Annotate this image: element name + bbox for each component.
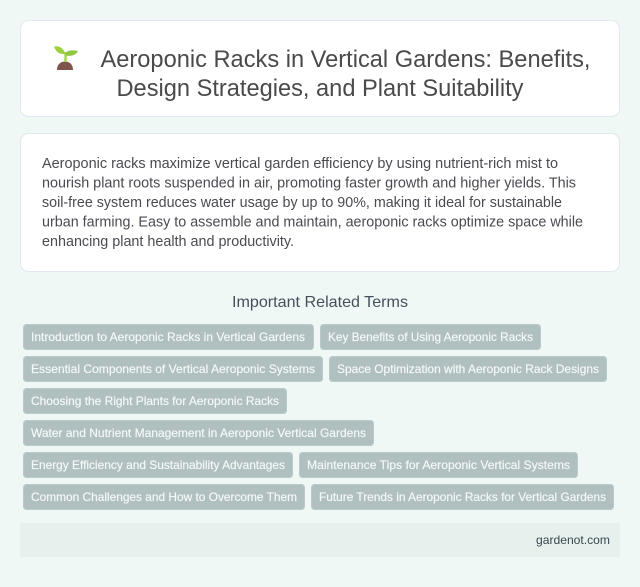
chip: Future Trends in Aeroponic Racks for Vertical Gardens xyxy=(319,490,606,504)
chip: Energy Efficiency and Sustainability Advantages xyxy=(31,458,285,472)
chip: Maintenance Tips for Aeroponic Vertical Systems xyxy=(307,458,570,472)
chip: Introduction to Aeroponic Racks in Vertical Gardens xyxy=(31,330,305,344)
panel: term chips xyxy=(24,324,614,510)
footer xyxy=(20,523,620,557)
chip xyxy=(312,484,614,510)
chip xyxy=(24,388,286,414)
footer: gardenot.com xyxy=(536,533,610,547)
summary text: urban farming. Easy to assemble and maintain, aeroponic racks optimize space while xyxy=(42,214,583,230)
chip: Choosing the Right Plants for Aeroponic Racks xyxy=(31,394,279,408)
chip: Water and Nutrient Management in Aeroponic Vertical Gardens xyxy=(31,426,366,440)
chip xyxy=(24,356,322,382)
chip xyxy=(320,324,540,350)
summary text xyxy=(42,156,583,250)
summary text: enhancing plant health and productivity. xyxy=(42,234,294,250)
summary text: soil-free system reduces water usage by up to 90%, making it ideal for sustainable xyxy=(42,195,562,211)
panel: summary xyxy=(20,134,620,272)
panel: title card xyxy=(20,20,620,116)
chip xyxy=(330,356,606,382)
chip: Essential Components of Vertical Aeroponic Systems xyxy=(31,362,315,376)
chip: Key Benefits of Using Aeroponic Racks xyxy=(328,330,533,344)
chip xyxy=(24,420,374,446)
heading: related terms: Important Related Terms xyxy=(232,294,408,311)
title: Design Strategies, and Plant Suitability xyxy=(116,75,524,102)
chip xyxy=(24,484,304,510)
title: Aeroponic Racks in Vertical Gardens: Benefits, xyxy=(100,46,590,73)
chip: Space Optimization with Aeroponic Rack Designs xyxy=(337,362,599,376)
chip: Common Challenges and How to Overcome Them xyxy=(31,490,297,504)
icon: sprout xyxy=(54,46,78,70)
title xyxy=(100,46,590,102)
summary text: nourish plant roots suspended in air, promoting faster growth and higher yields. This xyxy=(42,176,576,192)
chip xyxy=(24,324,314,350)
summary text: Aeroponic racks maximize vertical garden efficiency by using nutrient-rich mist to xyxy=(42,156,558,172)
chip xyxy=(24,452,292,478)
chip xyxy=(300,452,578,478)
